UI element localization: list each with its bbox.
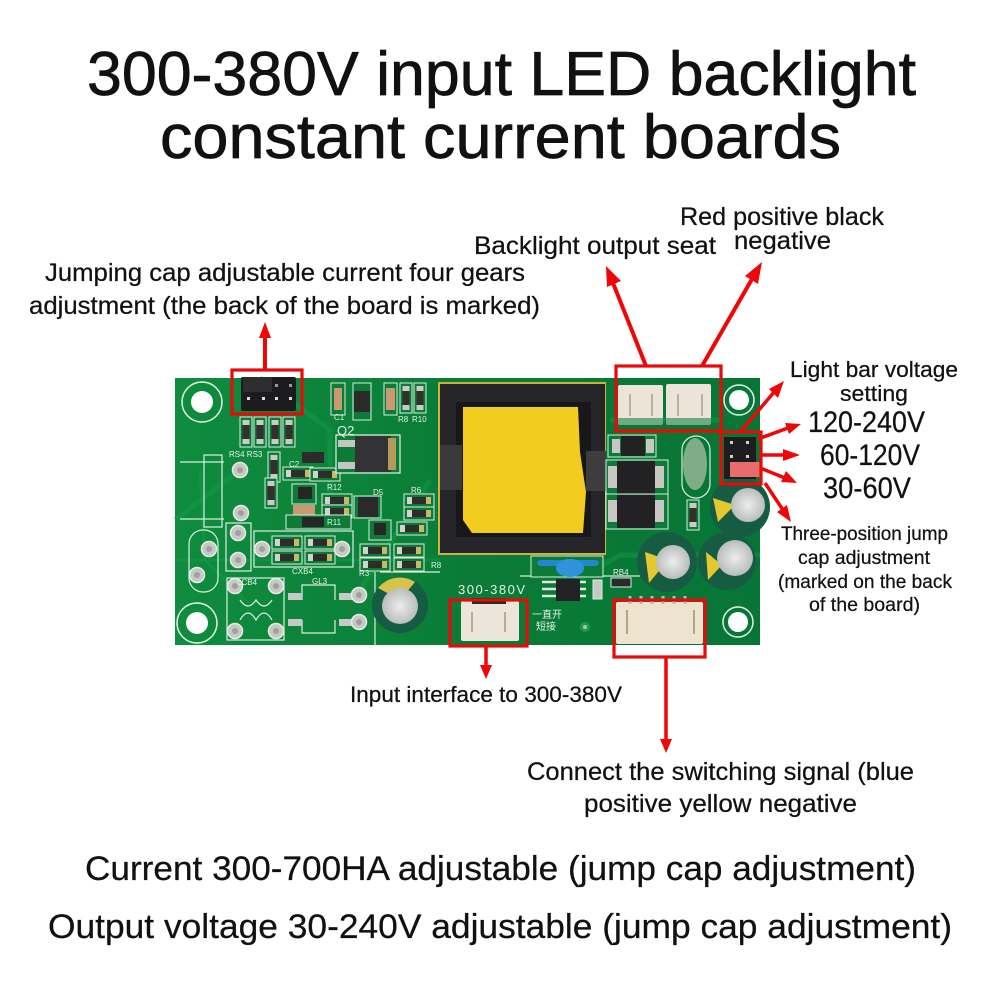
arrow: switching signal (660, 657, 672, 753)
electrolytic capacitor left (372, 577, 428, 633)
label: switching signal: Connect the switching signal (blue (527, 758, 914, 786)
silkscreen labels: R6 (411, 486, 422, 495)
label: three-position jump cap: Three-position jump (781, 523, 948, 545)
footer: current spec: Current 300-700HA adjustable (jump cap adjustment) (85, 850, 916, 888)
arrow: three-position jump cap (765, 483, 791, 522)
arrow: red positive black negative (702, 262, 762, 366)
label: light bar voltage setting: setting (840, 381, 908, 406)
silkscreen labels: LCB4 (237, 578, 258, 587)
title: 300-380V input LED backlight (87, 40, 916, 109)
label: jumping cap current: Jumping cap adjustable current four gears (45, 259, 525, 287)
label: three-position jump cap: of the board) (809, 594, 920, 616)
silkscreen labels: R3 (359, 569, 370, 578)
silkscreen labels: RB4 (613, 568, 629, 577)
voltage jumper header (724, 437, 760, 479)
transformer (438, 382, 606, 555)
label: jumping cap current: adjustment (the back of the board is marked) (29, 292, 540, 320)
silkscreen labels: 300-380V (458, 582, 525, 597)
label: three-position jump cap: cap adjustment (798, 547, 931, 569)
label: red positive black negative (680, 203, 884, 255)
silkscreen labels (229, 413, 629, 597)
blue Y capacitor and IC (531, 556, 631, 601)
short-circuit label: 短接 (536, 620, 556, 633)
label: backlight output seat: Backlight output seat (474, 232, 716, 260)
label: red positive black negative: Red positive black (680, 203, 884, 231)
resistor RB20 (687, 500, 699, 530)
label: voltage ranges: 120-240V (808, 406, 925, 439)
arrow: 60-120V (760, 449, 800, 461)
label: switching signal (527, 758, 914, 818)
label: switching signal: positive yellow negative (584, 790, 857, 818)
label: light bar voltage setting (790, 357, 958, 406)
red highlight boxes (232, 366, 761, 657)
label: voltage ranges: 30-60V (823, 472, 911, 505)
MOSFET Q2 (336, 435, 400, 473)
arrow: backlight output seat (606, 266, 646, 366)
label: three-position jump cap: (marked on the back (778, 571, 952, 593)
circuit board (175, 377, 770, 645)
silkscreen labels: GL3 (312, 577, 328, 586)
board substrate (175, 378, 760, 645)
arrow: current jumper (259, 322, 271, 369)
current jumper header (241, 377, 296, 411)
yellow winding (463, 407, 586, 533)
small SMD components left (240, 383, 426, 529)
arrow: input interface (480, 646, 492, 679)
silkscreen labels: R10 (412, 415, 427, 424)
label: three-position jump cap (778, 523, 952, 616)
arrow: light bar voltage setting (741, 381, 784, 431)
footer: voltage spec: Output voltage 30-240V adjustable (jump cap adjustment) (48, 908, 952, 946)
label: voltage ranges (808, 406, 925, 505)
title (87, 40, 916, 172)
silkscreen labels: C1 (334, 413, 345, 422)
label: red positive black negative: negative (734, 227, 831, 255)
thermistor NTC (682, 436, 710, 498)
silkscreen labels: D5 (373, 488, 384, 497)
label: input interface: Input interface to 300-380V (350, 682, 622, 707)
silkscreen labels: Q2 (337, 423, 354, 438)
signal connector (616, 596, 703, 644)
output capacitors (637, 477, 770, 592)
input connector (461, 598, 519, 641)
short-circuit label (532, 608, 590, 633)
label: jumping cap current (29, 259, 540, 320)
silkscreen circuit symbols (180, 455, 640, 645)
silkscreen labels: RS4 RS3 (229, 450, 263, 459)
arrow: 120-240V (758, 423, 801, 439)
diode D5 and resistors (272, 494, 434, 571)
silkscreen labels: CXB4 (292, 567, 313, 576)
label: voltage ranges: 60-120V (820, 439, 920, 472)
silkscreen labels: R8 (431, 561, 442, 570)
title: constant current boards (160, 103, 841, 172)
backlight output connectors (618, 384, 711, 425)
label: light bar voltage setting: Light bar voltage (790, 357, 958, 382)
arrow: 30-60V (760, 468, 797, 483)
diodes D4 DB11 DB10 (606, 435, 668, 529)
silkscreen labels: R11 (327, 518, 342, 527)
silkscreen labels: C2 (289, 460, 300, 469)
silkscreen labels: R12 (327, 483, 342, 492)
silkscreen labels: R8 (398, 415, 409, 424)
mounting holes (177, 382, 754, 643)
short-circuit label: 一直开 (532, 608, 562, 621)
